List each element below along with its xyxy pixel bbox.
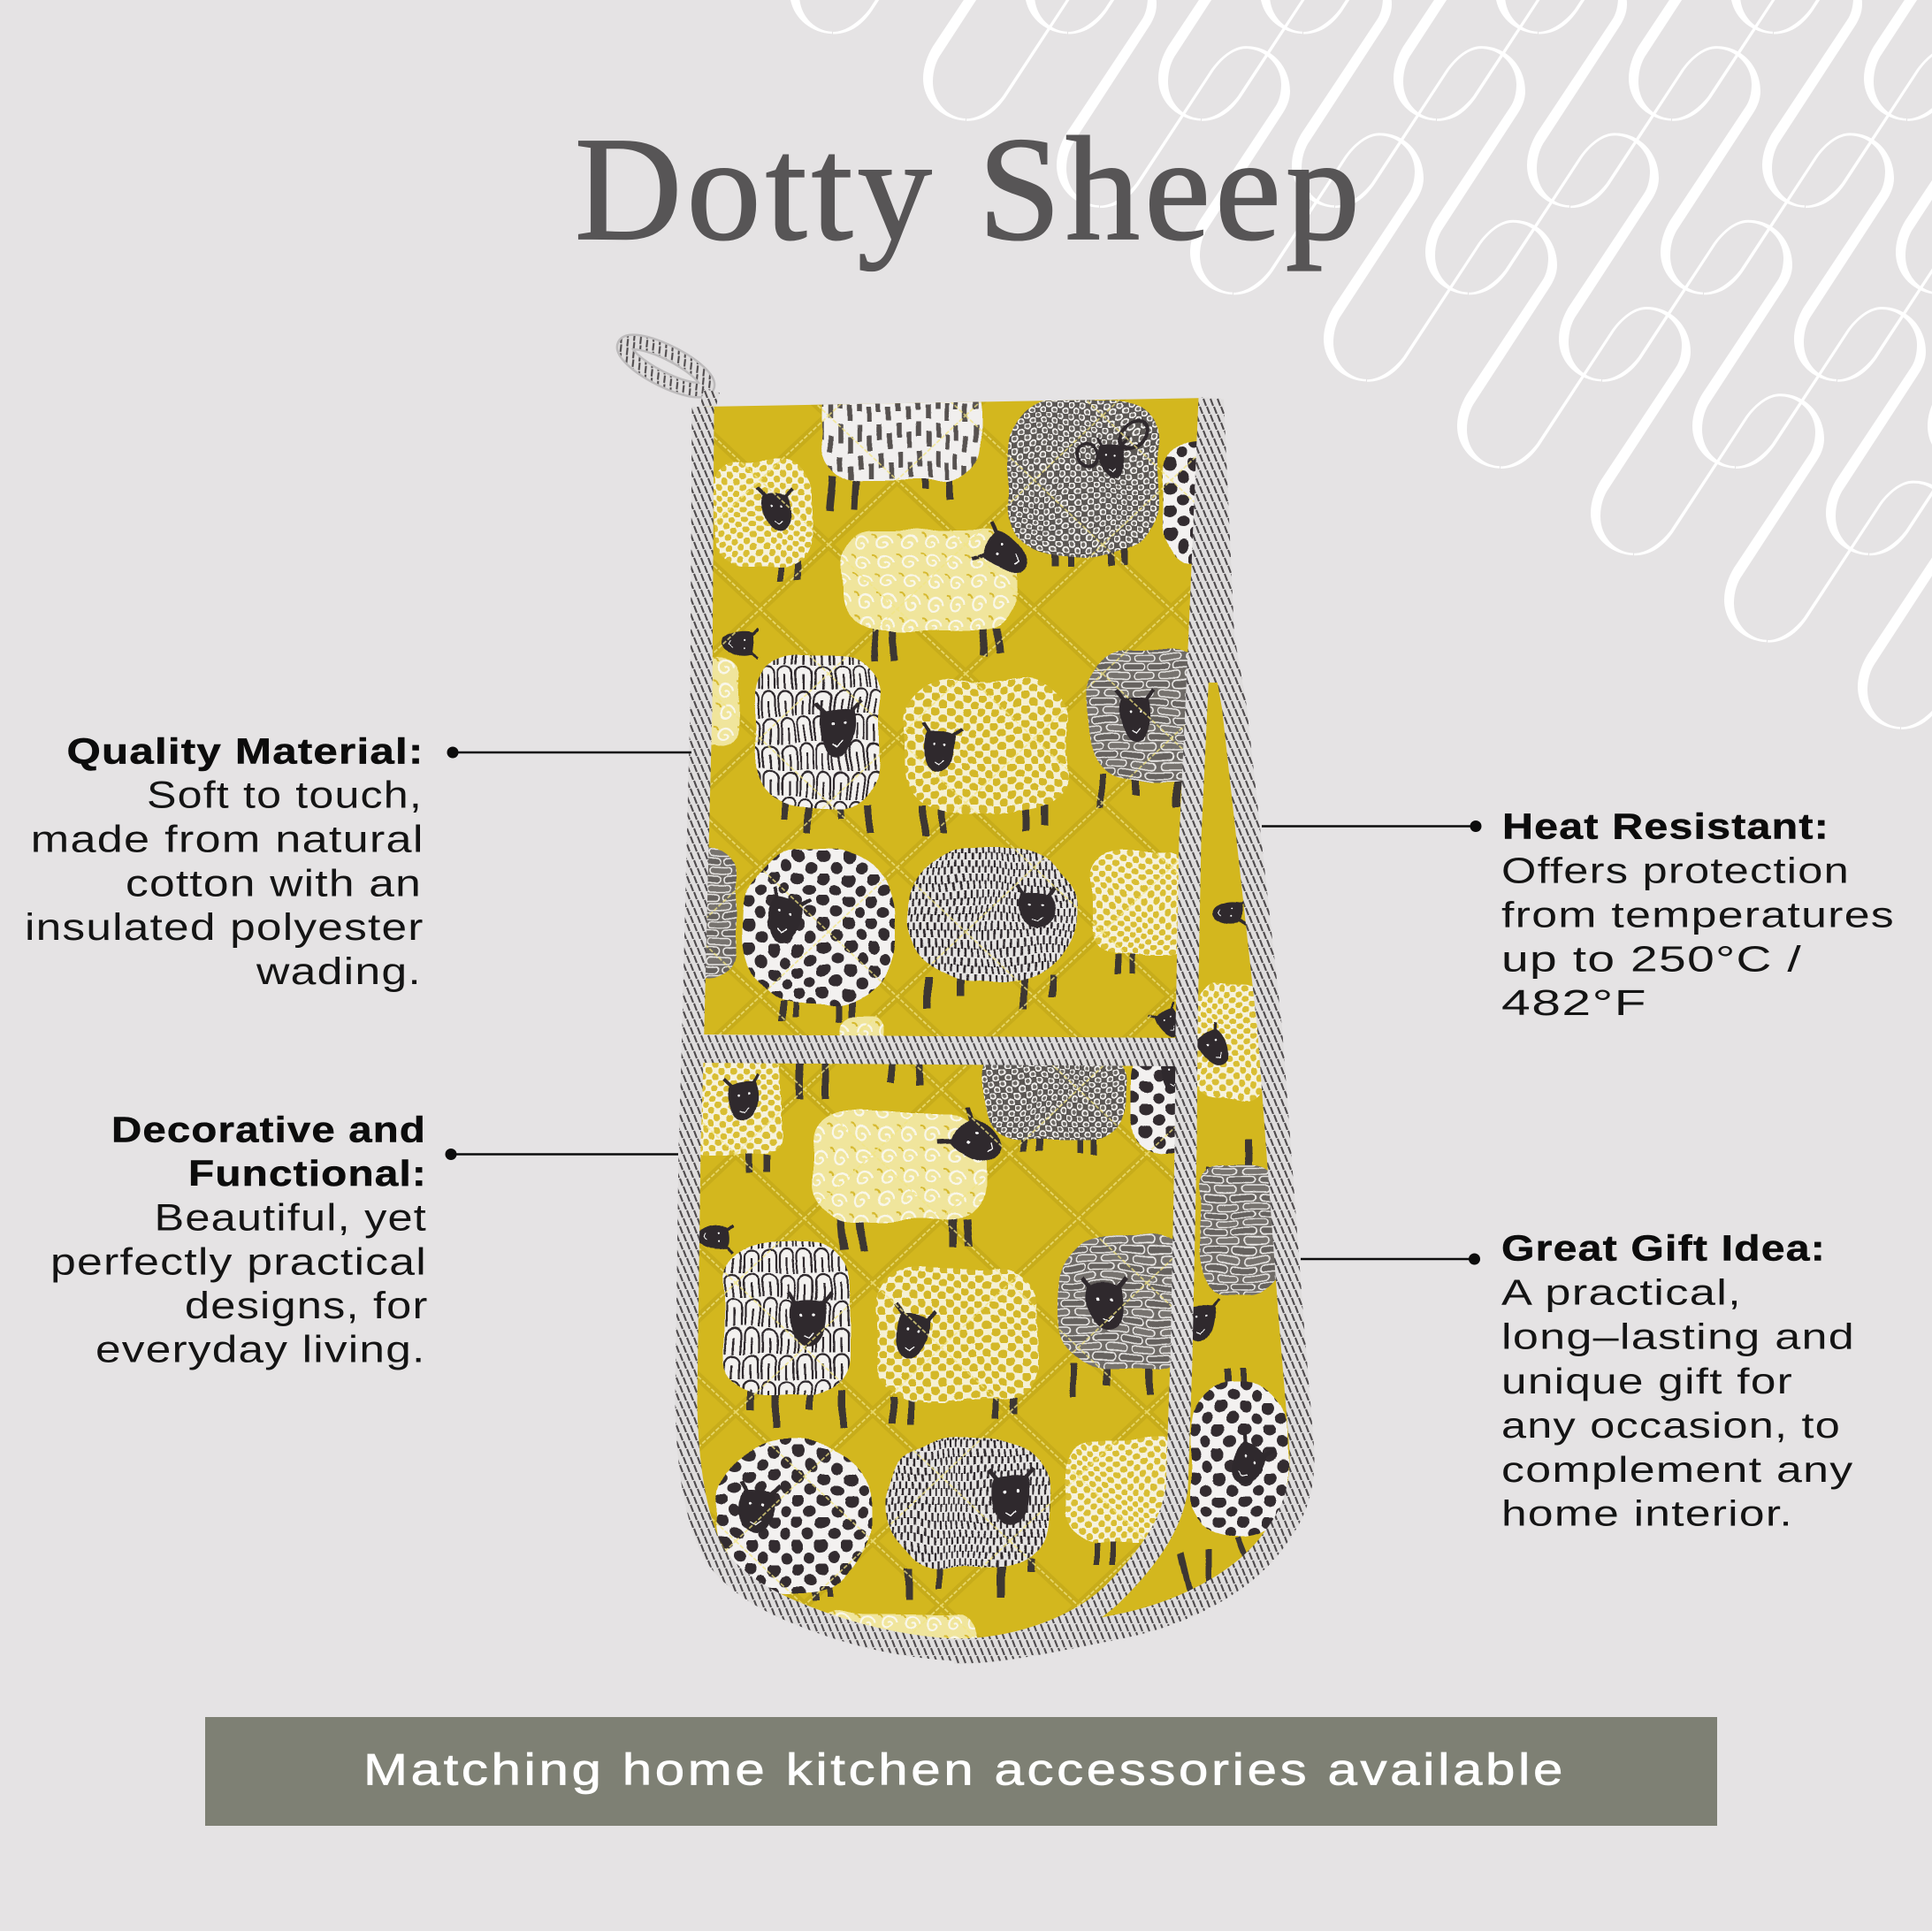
- callout text: everyday living.: [95, 1328, 426, 1370]
- sheep: scribble: [755, 653, 880, 835]
- callout: decorative and functional: [50, 1109, 678, 1370]
- callout text: complement any: [1501, 1449, 1853, 1490]
- sheep: big dots: [743, 849, 897, 1019]
- sheep: lower left head: [695, 1223, 732, 1253]
- callout text: [1501, 1227, 1855, 1534]
- back panel of glove: [954, 400, 1302, 1652]
- callout text: unique gift for: [1501, 1361, 1793, 1401]
- title: Dotty Sheep: [575, 107, 1360, 271]
- printed fabric on front panel: [697, 400, 1197, 1639]
- footer banner: [205, 1717, 1717, 1826]
- quilting, lower: [672, 1052, 1203, 1671]
- double oven glove: [619, 333, 1302, 1671]
- front panel binding: [686, 398, 1210, 1650]
- callout text: Functional:: [188, 1153, 427, 1194]
- sheep: yellow dots: [714, 461, 812, 581]
- leader line: [1262, 820, 1482, 832]
- callout text: Quality Material:: [67, 731, 424, 772]
- callout text: wading.: [256, 950, 422, 993]
- sheep: long dash: [821, 401, 983, 511]
- sheep: yellow dots right: [1089, 849, 1180, 974]
- callout text: Heat Resistant:: [1502, 806, 1829, 847]
- sheep: lower brick: [1059, 1238, 1201, 1396]
- leader line: [1301, 1254, 1480, 1264]
- banner text: Matching home kitchen accessories available: [363, 1745, 1566, 1795]
- front panel of glove: [672, 371, 1242, 1671]
- callout text: [50, 1109, 428, 1370]
- callout text: from temperatures: [1501, 894, 1895, 935]
- sheep: fragments above pocket: [839, 1002, 1176, 1038]
- callout text: home interior.: [1501, 1493, 1793, 1534]
- leader line: [446, 1149, 678, 1160]
- callout text: up to 250°C /: [1501, 938, 1802, 979]
- callout text: cotton with an: [126, 863, 422, 905]
- callout text: [1501, 806, 1895, 1023]
- callout text: 482°F: [1501, 982, 1647, 1023]
- sheep: lower scribble: [725, 1241, 849, 1428]
- callout text: [25, 731, 424, 993]
- sheep: lower dots at fold: [1130, 1066, 1176, 1155]
- sheep: bottom dense dash: [886, 1439, 1050, 1598]
- sheep: lower swirl: [811, 1103, 1012, 1250]
- sheep: bottom big dots: [718, 1441, 871, 1602]
- sheep: yellow cells: [906, 678, 1068, 835]
- leader line: [447, 746, 691, 759]
- pocket binding: [699, 1049, 1180, 1052]
- callout text: perfectly practical: [50, 1241, 427, 1284]
- sheep: ram: [1008, 399, 1158, 567]
- sheep: bottom yellow dots: [1065, 1439, 1198, 1565]
- hanging loop: [619, 333, 713, 416]
- sheep: lower grey dots: [796, 1063, 1126, 1156]
- callout text: long–lasting and: [1501, 1316, 1855, 1356]
- quilting, upper: [681, 389, 1229, 1043]
- callout text: Great Gift Idea:: [1501, 1227, 1826, 1268]
- sheep: dense dash: [910, 846, 1075, 1010]
- callout text: A practical,: [1501, 1271, 1742, 1312]
- callout text: any occasion, to: [1501, 1405, 1841, 1446]
- background ribbon pattern: [699, 0, 1932, 816]
- callout text: Soft to touch,: [147, 774, 423, 816]
- callout: heat resistant: [1262, 806, 1895, 1023]
- callout text: Decorative and: [111, 1109, 426, 1149]
- printed sheep: [699, 400, 1197, 1639]
- callout text: Offers protection: [1501, 850, 1850, 890]
- callout: great gift idea: [1301, 1227, 1855, 1534]
- callout: quality material: [25, 731, 691, 993]
- sheep: lower yellow dots: [700, 1063, 783, 1172]
- callout text: Beautiful, yet: [154, 1197, 427, 1240]
- sheep: dots at fold: [1162, 441, 1197, 564]
- sheep: swirl: [841, 523, 1037, 659]
- sheep: brick: [1086, 648, 1188, 808]
- sheep: lower yellow cells: [877, 1268, 1038, 1423]
- sheep: left edge head: [711, 628, 759, 746]
- sheep: partial grey left: [706, 847, 737, 978]
- callout text: made from natural: [31, 819, 424, 861]
- back panel sheep: [1180, 901, 1287, 1591]
- sheep: bottom swirl fragment: [817, 1614, 980, 1667]
- callout text: insulated polyester: [25, 906, 424, 949]
- callout text: designs, for: [185, 1285, 428, 1327]
